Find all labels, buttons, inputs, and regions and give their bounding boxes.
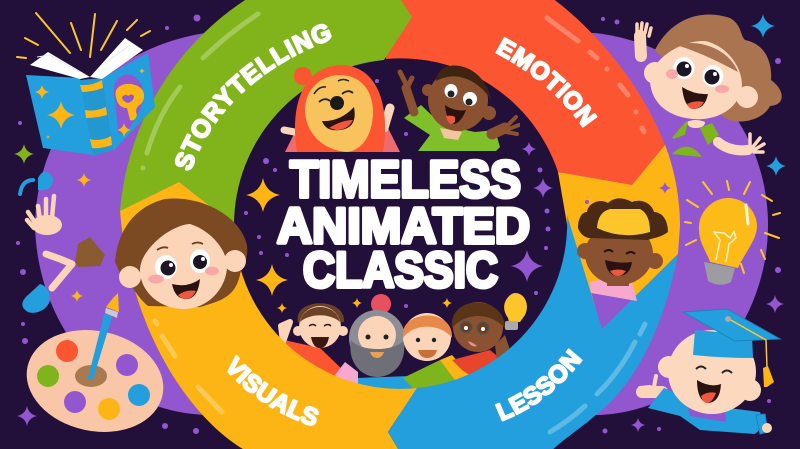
icon: paint palette	[17, 293, 173, 444]
group of people at bottom of circle	[281, 293, 527, 400]
purple backing band	[35, 33, 768, 415]
label: lesson: LESSON	[495, 348, 583, 422]
character: girl on green and yellow ring	[115, 198, 247, 309]
character: girl top right	[637, 15, 782, 157]
icon: open book	[17, 13, 155, 156]
icon: lightbulb	[685, 181, 780, 285]
character: child on yellow segment	[577, 198, 668, 301]
character: yellow hooded blob	[284, 65, 400, 152]
character: graduate child	[640, 309, 780, 434]
purple notch	[591, 292, 638, 331]
title	[277, 151, 530, 298]
title: TIMELESS	[290, 151, 521, 209]
ring segment: lesson (blue)	[388, 215, 678, 449]
person: child with glasses and bulb	[452, 293, 527, 382]
ring segment: storytelling (green)	[120, 0, 412, 225]
person: ginger child	[403, 313, 470, 392]
center dark circle	[230, 54, 570, 394]
ring segment: lesson backing (yellow right)	[558, 145, 680, 329]
person: boy in red	[278, 303, 348, 376]
title: ANIMATED	[277, 198, 530, 254]
title: CLASSIC	[303, 242, 498, 298]
character: boy in green shirt	[400, 66, 519, 151]
label: storytelling: STORYTELLING	[174, 24, 332, 171]
ring segment: visuals (yellow left)	[120, 182, 417, 449]
ring segment: emotion (orange)	[386, 0, 665, 185]
person: grandfather with beard	[335, 294, 416, 394]
icon: waving hands	[20, 172, 105, 313]
label: visuals: VISUALS	[227, 354, 319, 426]
label: emotion: EMOTION	[495, 36, 598, 128]
ring highlights	[143, 14, 645, 432]
